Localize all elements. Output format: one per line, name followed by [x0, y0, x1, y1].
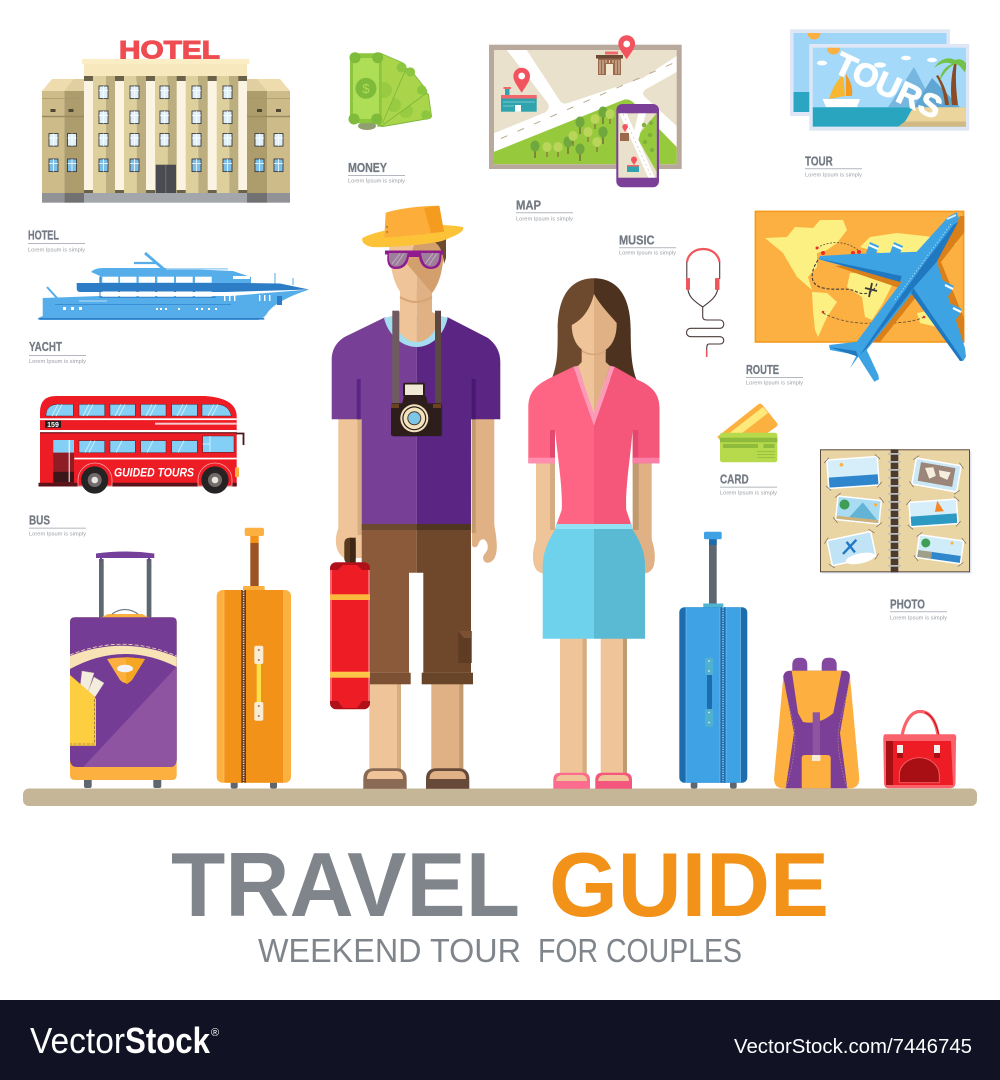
footer logo: ®: [211, 1027, 219, 1039]
footer bar: [0, 1000, 1000, 1080]
illustration: money: $: [362, 81, 370, 96]
map pin: [513, 68, 530, 93]
illustration: blue suitcase: [679, 532, 747, 788]
label: card: Lorem Ipsum is simply: [720, 490, 777, 496]
footer logo: Stock: [125, 1020, 211, 1061]
plane: [818, 212, 966, 382]
label: bus: BUS: [29, 512, 50, 527]
man head: [389, 234, 446, 302]
illustration: tour cards: [790, 26, 969, 131]
illustration: double-decker bus: [38, 396, 244, 494]
tours text: TOURS: [829, 45, 948, 126]
title: GUIDE: [549, 835, 829, 936]
label: route: [746, 362, 803, 387]
illustration: backpack: [774, 658, 859, 788]
title: [171, 835, 829, 936]
photo: island: [913, 532, 967, 567]
label: hotel: Lorem Ipsum is simply: [28, 248, 85, 254]
label: route: Lorem Ipsum is simply: [746, 381, 803, 387]
icon: headphones: [686, 249, 724, 357]
camera strap: [392, 311, 441, 409]
title: TRAVEL: [171, 835, 520, 936]
illustration: hotel building: [42, 36, 290, 203]
continents: [765, 220, 957, 337]
illustration: photo album: [820, 449, 972, 574]
photo: palm mountains: [833, 493, 884, 527]
label: tour: Lorem Ipsum is simply: [805, 172, 862, 178]
illustration: purple suitcase: [70, 552, 177, 788]
label: map: [516, 197, 573, 222]
man shorts: [362, 524, 473, 684]
man hat: [362, 206, 463, 247]
man arms: [336, 415, 497, 563]
subtitle: FOR COUPLES: [538, 932, 742, 969]
illustration: city map with phone: [489, 35, 682, 187]
man collar: [384, 316, 448, 347]
map building: airport: [501, 87, 537, 112]
woman face: [572, 294, 617, 353]
label: money: MONEY: [348, 160, 387, 175]
label: hotel: HOTEL: [28, 228, 59, 242]
woman blouse: [528, 366, 660, 524]
label: photo: Lorem Ipsum is simply: [890, 615, 947, 621]
subtitle: [258, 932, 742, 969]
label: tour: [805, 153, 862, 178]
bus slogan: GUIDED TOURS: [114, 466, 194, 480]
footer logo: [30, 1020, 219, 1061]
photo: sailboat: [906, 496, 961, 530]
map pin: [618, 35, 635, 59]
woman legs: [560, 638, 627, 774]
label: map: Lorem Ipsum is simply: [516, 216, 573, 222]
plane shadow: [835, 216, 975, 345]
label: music: Lorem Ipsum is simply: [619, 251, 676, 257]
man sunglasses: [385, 250, 443, 269]
woman skirt: [543, 524, 645, 639]
label: card: [720, 471, 777, 496]
label: bus: [29, 512, 86, 538]
subtitle: WEEKEND TOUR: [258, 932, 521, 969]
label: photo: PHOTO: [890, 596, 925, 611]
bus route plate: 159: [47, 422, 59, 429]
ground shelf: [23, 788, 977, 806]
label: route: ROUTE: [746, 362, 779, 377]
illustration: red handbag: [883, 712, 956, 788]
figure: woman: [528, 278, 660, 789]
hotel sign: HOTEL: [119, 36, 220, 64]
label: yacht: YACHT: [29, 339, 62, 354]
footer url: VectorStock.com/7446745: [734, 1036, 972, 1058]
illustration: money: [348, 52, 432, 130]
illustration: world route map with plane: [755, 211, 975, 382]
camera: [391, 383, 443, 437]
label: hotel: [28, 228, 85, 254]
woman hair: [552, 278, 637, 381]
illustration: orange suitcase: [217, 528, 291, 788]
map building: hotel: [596, 52, 623, 75]
woman arms: [533, 460, 655, 574]
illustration: bank cards: [717, 404, 778, 462]
illustration: yacht: [38, 253, 309, 320]
label: card: CARD: [720, 471, 749, 486]
man legs: [369, 684, 463, 770]
figure: man: [330, 206, 500, 789]
bus route plate: [45, 421, 61, 429]
label: yacht: [29, 339, 86, 365]
label: map: MAP: [516, 197, 541, 212]
footer logo: Vector: [30, 1020, 125, 1061]
phone: [616, 104, 659, 187]
photo: airplane: [823, 528, 880, 570]
label: money: [348, 160, 405, 185]
boarding tickets: [80, 671, 104, 697]
label: tour: TOUR: [805, 153, 833, 168]
label: music: [619, 232, 676, 257]
label: money: Lorem Ipsum is simply: [348, 179, 405, 185]
woman shoes: [553, 773, 632, 789]
label: photo: [890, 596, 947, 621]
woman neck: [578, 346, 610, 413]
photo: beach sea: [824, 454, 882, 491]
photo: world map: [909, 455, 964, 495]
man t-shirt: [332, 317, 500, 524]
man sandals: [363, 768, 469, 789]
label: music: MUSIC: [619, 232, 655, 247]
red hand luggage: [330, 538, 370, 709]
man neck: [392, 290, 441, 342]
label: yacht: Lorem Ipsum is simply: [29, 359, 86, 365]
label: bus: Lorem Ipsum is simply: [29, 532, 86, 538]
